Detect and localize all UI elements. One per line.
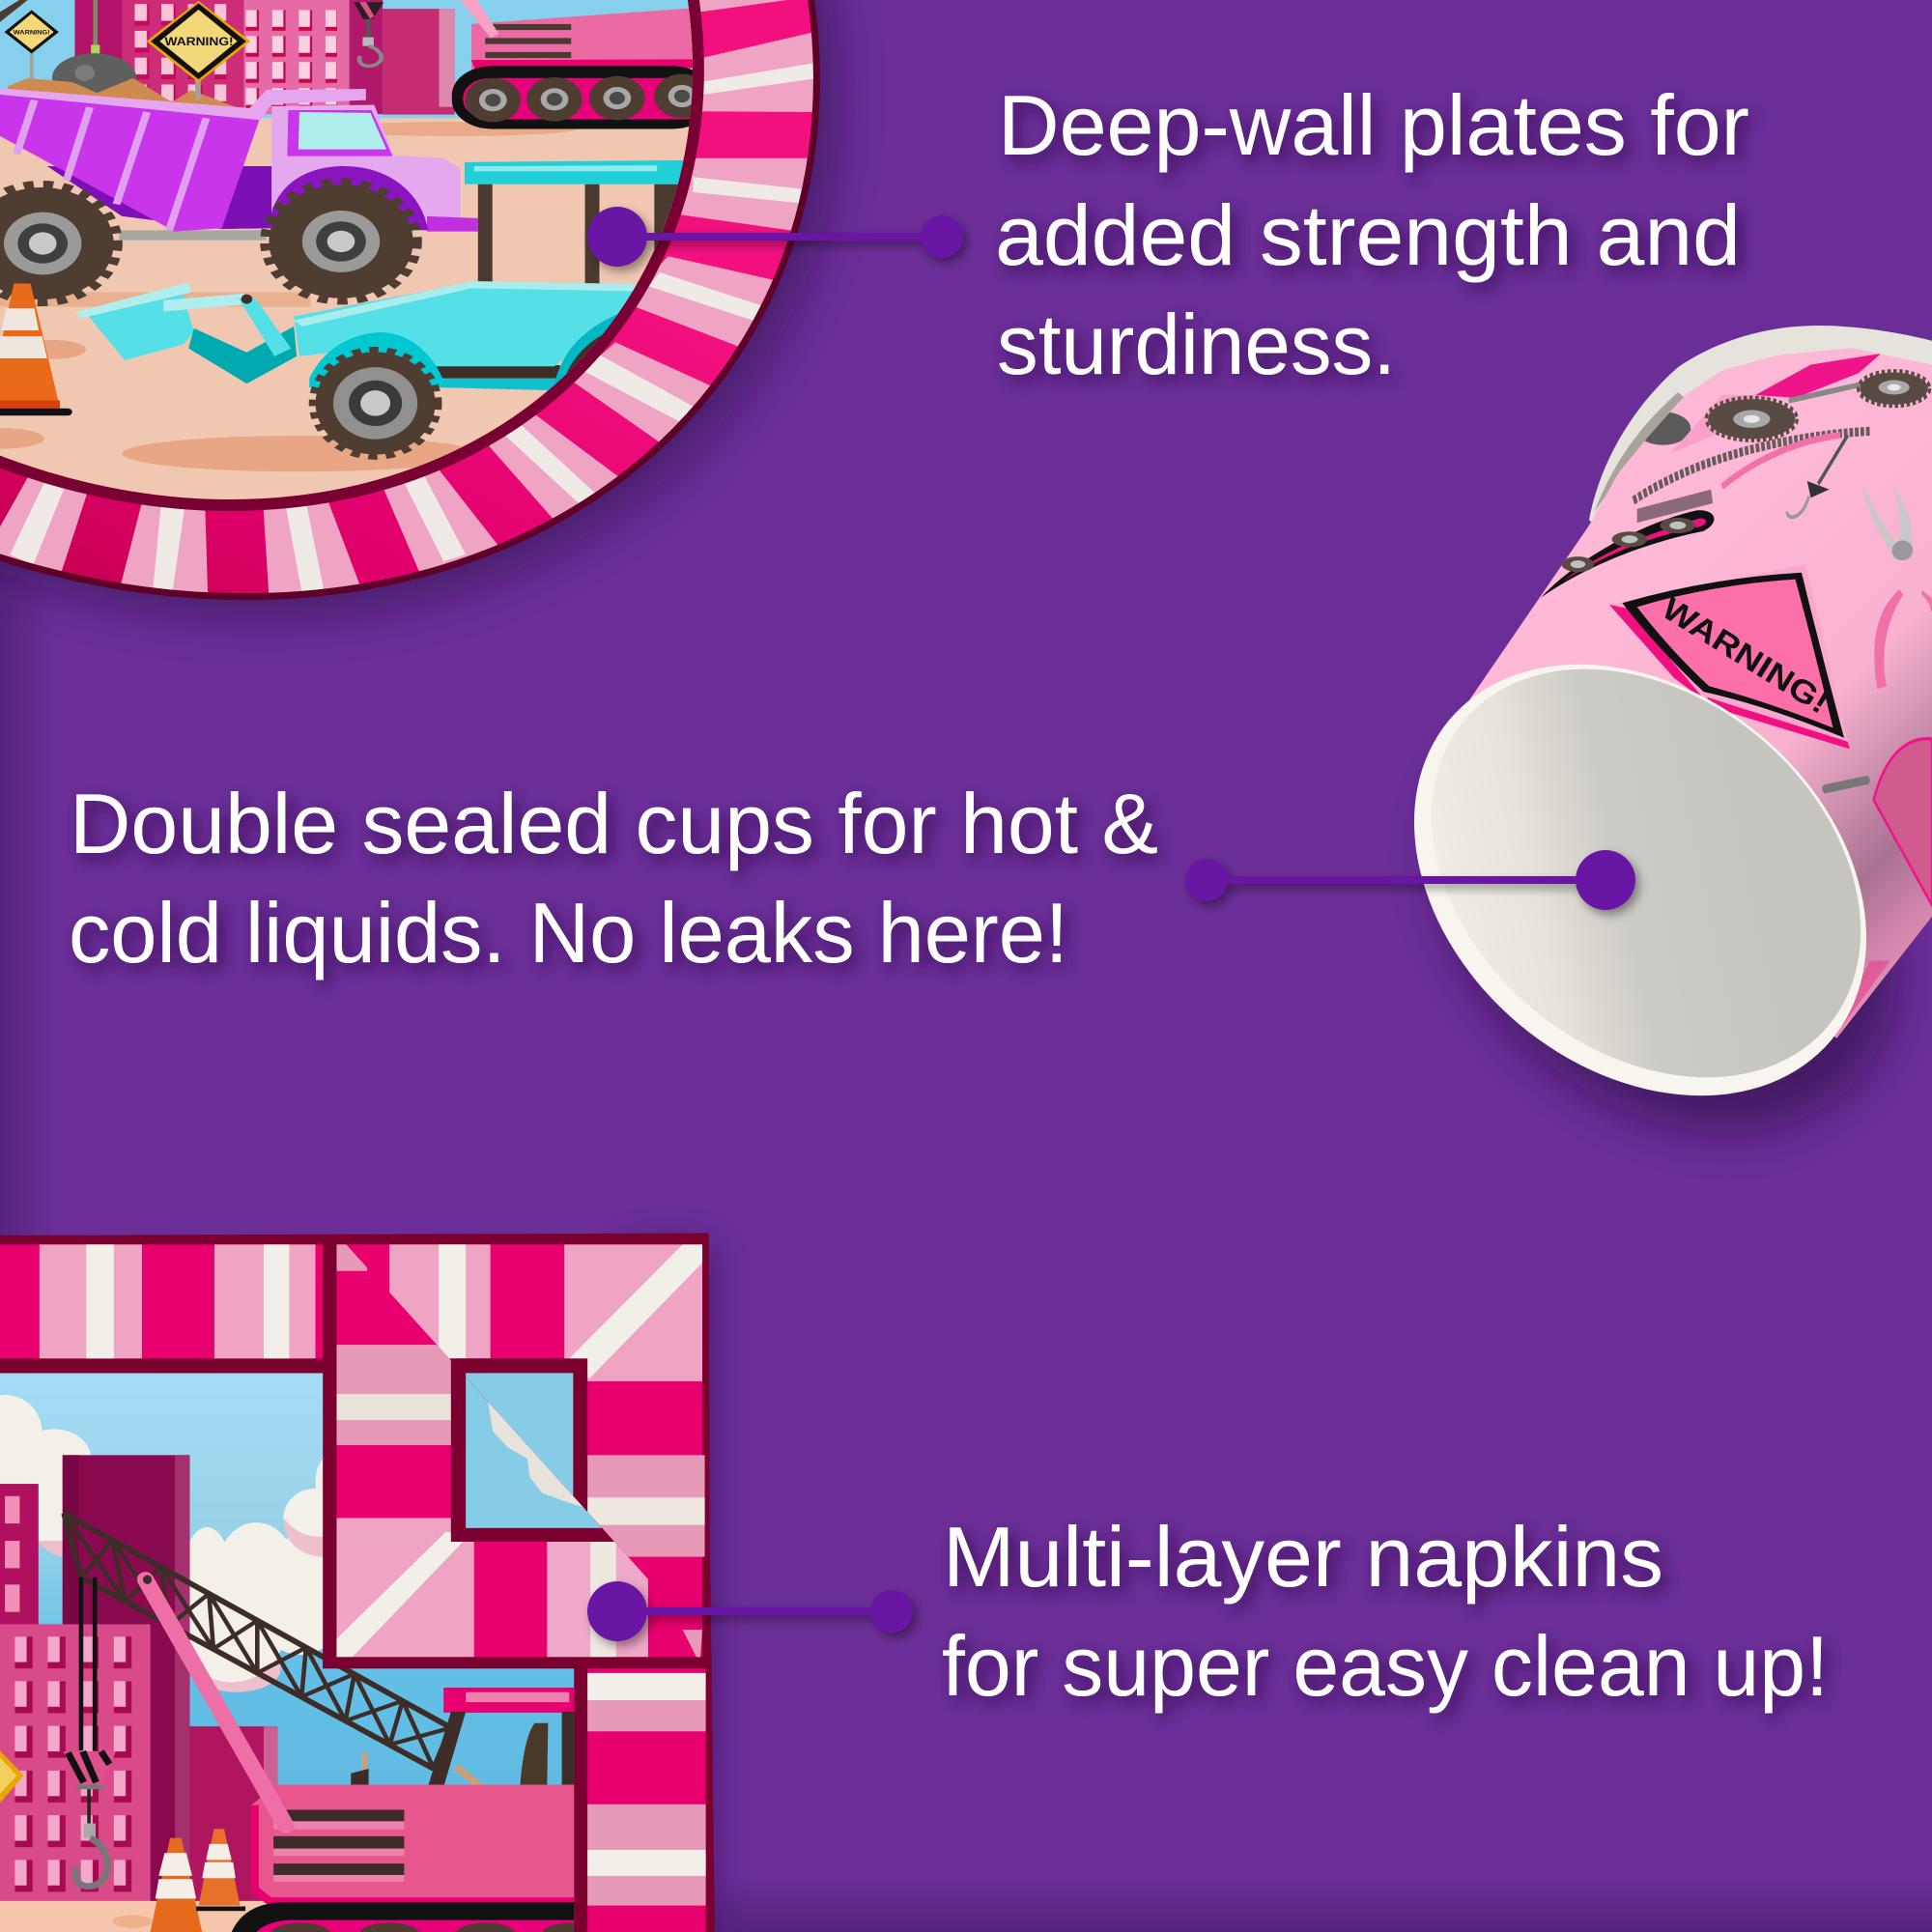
cup print: warning sign bbox=[1609, 564, 1850, 749]
small warning sign bbox=[5, 10, 59, 80]
wrecking ball bbox=[52, 0, 136, 103]
heading: plate text: sturdiness. bbox=[997, 297, 1396, 392]
warning sign edge bbox=[0, 1750, 23, 1803]
buildings bbox=[0, 1455, 277, 1904]
heading: plate text: added strength and bbox=[995, 187, 1741, 283]
cup warning text: WARNING! bbox=[1656, 590, 1835, 721]
panel: napkin bbox=[0, 1231, 720, 1932]
teal bulldozer bbox=[74, 281, 654, 456]
callout: cup connector bbox=[1185, 850, 1635, 910]
napkin artwork: construction scene bbox=[0, 1373, 601, 1932]
heading: plate text bbox=[995, 77, 1749, 392]
folded napkin corner bbox=[323, 1236, 712, 1668]
teal canopy bbox=[465, 160, 694, 284]
heading: cup text bbox=[69, 776, 1158, 980]
fold lower-left layer bbox=[336, 1244, 702, 1666]
large warning sign: WARNING! bbox=[164, 36, 234, 49]
panel: paper plate bbox=[0, 0, 855, 635]
excavator cab bbox=[232, 1688, 601, 1932]
excavator bbox=[452, 0, 713, 128]
dirt pile bbox=[8, 77, 236, 107]
callout: plate connector bbox=[587, 207, 963, 267]
crane boom bbox=[64, 1514, 451, 1769]
heading: plate text: Deep-wall plates for bbox=[998, 77, 1749, 173]
buildings bbox=[74, 0, 455, 115]
plate rim stripes bbox=[0, 0, 832, 597]
crane strut bbox=[143, 1575, 286, 1826]
heading: napkin text: Multi-layer napkins bbox=[943, 1509, 1663, 1605]
ground bbox=[0, 1901, 574, 1932]
tracks bbox=[232, 1902, 577, 1932]
panel: paper cup bbox=[1328, 326, 1932, 1222]
dump truck bbox=[0, 88, 478, 302]
callout: napkin connector bbox=[587, 1581, 913, 1641]
crane boom fragment bbox=[0, 0, 28, 22]
napkin right border stripes bbox=[574, 1666, 706, 1932]
napkin top border stripes bbox=[0, 1244, 330, 1358]
heading: napkin text: for super easy clean up! bbox=[942, 1618, 1829, 1714]
heading: napkin text bbox=[942, 1509, 1829, 1714]
plate artwork: construction scene bbox=[0, 0, 721, 471]
traffic cone bbox=[0, 283, 72, 415]
cup print: crane bbox=[1541, 431, 1870, 598]
traffic cones bbox=[151, 1829, 245, 1932]
dump truck wheels bbox=[0, 183, 416, 302]
fold upper-right layer bbox=[336, 1244, 705, 1666]
crane hook bbox=[354, 2, 384, 66]
heading: cup text: Double sealed cups for hot & bbox=[70, 776, 1158, 871]
cup print: hard hat bbox=[1874, 739, 1932, 905]
heading: cup text: cold liquids. No leaks here! bbox=[69, 885, 1068, 980]
cup print: dump truck bbox=[1635, 354, 1930, 453]
cup rim bbox=[1589, 326, 1932, 539]
large warning sign bbox=[147, 1, 250, 100]
clouds bbox=[0, 1395, 355, 1692]
cup print: pliers bbox=[1822, 484, 1932, 794]
small warning sign: WARNING! bbox=[14, 29, 50, 36]
crane hook bbox=[63, 1577, 116, 1887]
cup base bbox=[1328, 576, 1932, 1184]
